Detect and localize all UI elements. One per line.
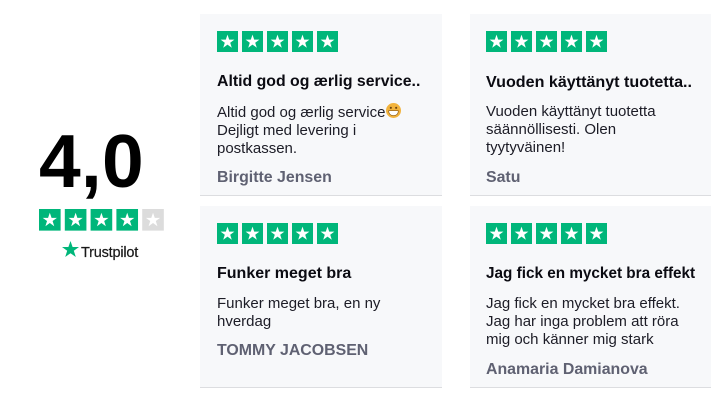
review text <box>486 103 656 156</box>
panel: review Tommy Jacobsen <box>200 206 442 388</box>
review text: Altid god og ærlig service <box>217 104 385 121</box>
review title: Jag fick en mycket bra effekt <box>486 265 695 282</box>
review text: Jag har inga problem att röra <box>486 313 679 330</box>
review text: mig och känner mig stark <box>486 331 654 348</box>
rating stars: 4 of 5 <box>39 209 164 231</box>
Trustpilot logo <box>62 241 138 261</box>
five stars <box>486 223 607 244</box>
review text: postkassen. <box>217 140 297 157</box>
review text <box>217 295 380 330</box>
Trustpilot wordmark: Trustpilot <box>81 245 138 261</box>
review text: Funker meget bra, en ny <box>217 295 380 312</box>
reviewer name: Satu <box>486 169 520 186</box>
panel: review Anamaria Damianova <box>470 206 711 388</box>
review title: Vuoden käyttänyt tuotetta.. <box>486 73 692 91</box>
review text: Vuoden käyttänyt tuotetta <box>486 103 656 120</box>
reviewer name: Birgitte Jensen <box>217 169 332 186</box>
panel: review Birgitte Jensen <box>200 14 442 196</box>
review text: tyytyväinen! <box>486 139 565 156</box>
review text <box>217 103 401 157</box>
five stars <box>217 223 338 244</box>
panel: overall rating <box>39 119 164 261</box>
icon: Trustpilot star <box>62 241 79 257</box>
reviewer name: TOMMY JACOBSEN <box>217 342 368 359</box>
five stars <box>486 31 607 52</box>
five stars <box>217 31 338 52</box>
review text: Dejligt med levering i <box>217 122 356 139</box>
review text: Jag fick en mycket bra effekt. <box>486 295 680 312</box>
overall score: 4,0 <box>39 119 144 203</box>
review title: Funker meget bra <box>217 265 351 282</box>
review text <box>486 295 680 348</box>
panel: review Satu <box>470 14 711 196</box>
review text: säännöllisesti. Olen <box>486 121 616 138</box>
reviewer name: Anamaria Damianova <box>486 361 648 378</box>
review text: hverdag <box>217 313 271 330</box>
review title: Altid god og ærlig service.. <box>217 73 420 90</box>
